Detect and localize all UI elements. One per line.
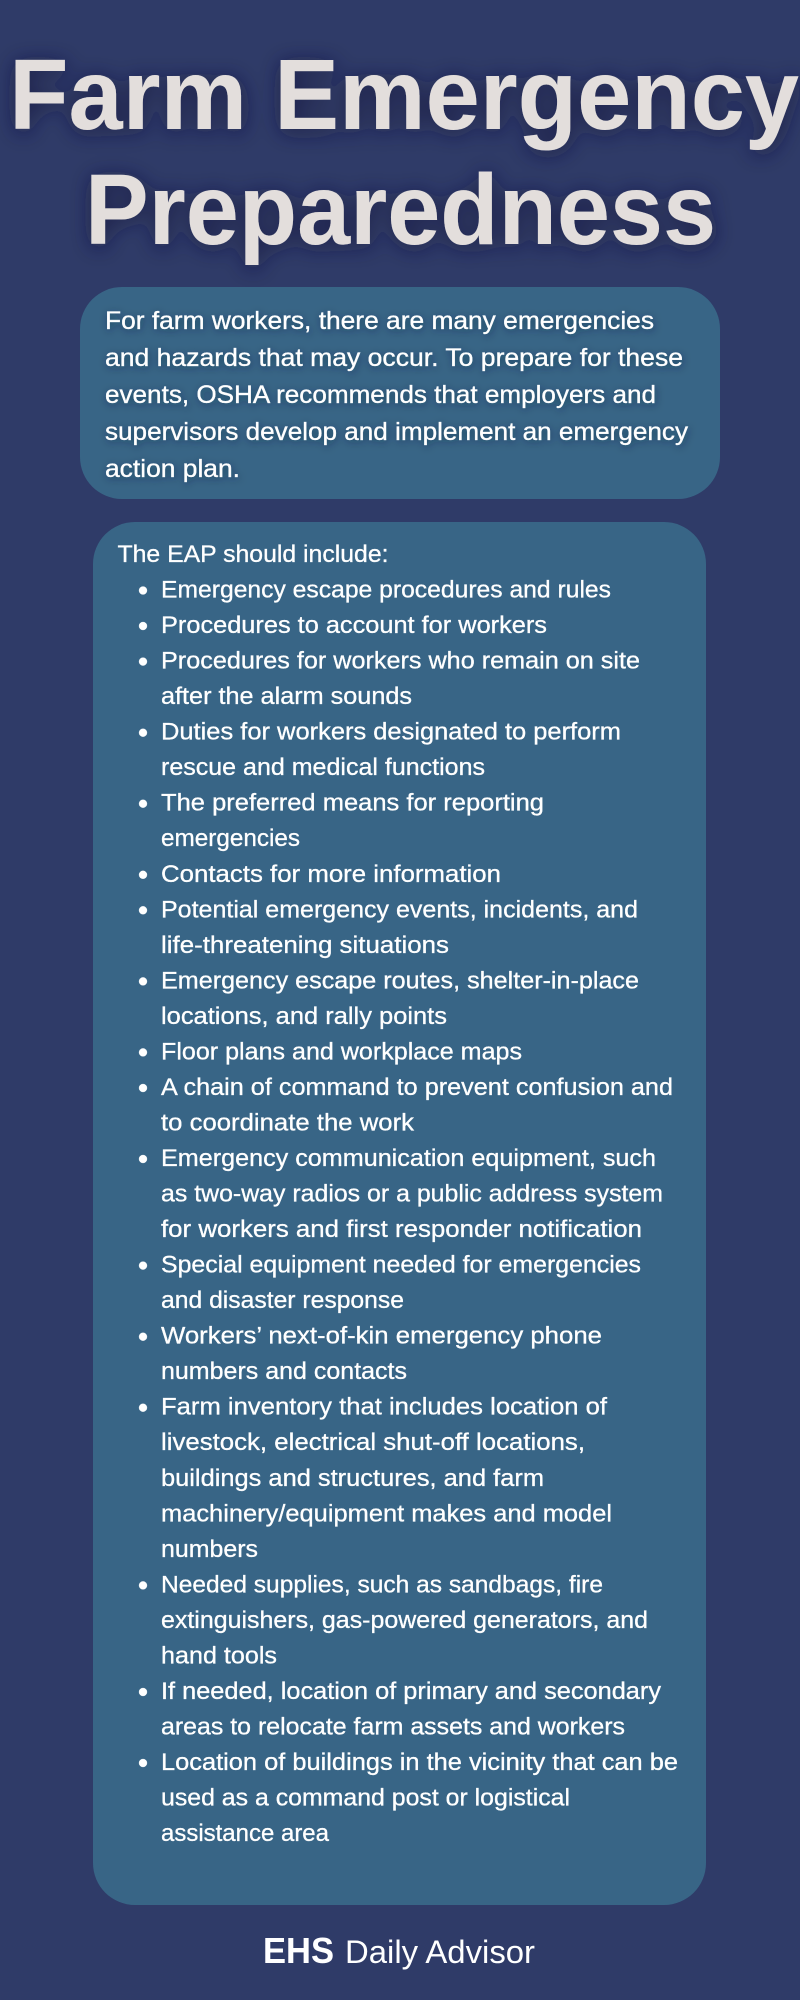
list item: workers on site: after the alarm sounds bbox=[161, 683, 412, 710]
list item: rescue duties: Duties for workers designated to perform bbox=[161, 719, 621, 746]
list item: workers on site bbox=[139, 648, 640, 710]
list item: next of kin bbox=[139, 1323, 602, 1385]
list item: potential events bbox=[139, 896, 638, 959]
list item: special equipment: and disaster response bbox=[161, 1287, 404, 1314]
list item: reporting: The preferred means for reporting bbox=[161, 790, 544, 817]
list item: farm inventory: numbers bbox=[161, 1536, 258, 1563]
list item: needed supplies: hand tools bbox=[161, 1642, 277, 1669]
list item: rescue duties bbox=[139, 719, 621, 781]
list item: special equipment bbox=[139, 1252, 641, 1314]
list item: account for workers: Procedures to account for workers bbox=[161, 612, 547, 639]
intro text bbox=[105, 307, 689, 483]
intro text: action plan. bbox=[105, 455, 240, 483]
footer logo: Daily Advisor bbox=[345, 1934, 535, 1970]
list item: communication equipment: Emergency communication equipment, such bbox=[161, 1145, 656, 1172]
list item: chain of command: A chain of command to prevent confusion and bbox=[161, 1074, 673, 1101]
list item: communication equipment: for workers and first responder notification bbox=[161, 1216, 642, 1243]
intro text: events, OSHA recommends that employers and bbox=[105, 381, 656, 409]
list item: contacts: Contacts for more information bbox=[161, 861, 501, 888]
list item: potential events: life-threatening situations bbox=[161, 932, 449, 959]
list item: command post bbox=[139, 1749, 678, 1847]
intro text: For farm workers, there are many emergencies bbox=[105, 307, 654, 335]
list item: needed supplies: Needed supplies, such as sandbags, fire bbox=[161, 1571, 603, 1598]
title: Farm Emergency bbox=[9, 39, 799, 151]
list item: reporting bbox=[139, 790, 544, 852]
list heading: The EAP should include: bbox=[118, 541, 388, 568]
list item: rescue duties: rescue and medical functions bbox=[161, 754, 485, 781]
list item: communication equipment: as two-way radios or a public address system bbox=[161, 1180, 663, 1208]
list item: farm inventory: Farm inventory that includes location of bbox=[161, 1394, 607, 1421]
panel: EAP list bbox=[93, 522, 706, 1905]
intro text: and hazards that may occur. To prepare for these bbox=[105, 344, 683, 372]
footer logo bbox=[263, 1930, 535, 1971]
intro text: supervisors develop and implement an emergency bbox=[105, 418, 689, 446]
list item: relocation areas: areas to relocate farm assets and workers bbox=[161, 1714, 625, 1740]
list item: farm inventory: machinery/equipment makes and model bbox=[161, 1500, 612, 1527]
list item: needed supplies: extinguishers, gas-powered generators, and bbox=[161, 1607, 648, 1634]
list item: floor plans: Floor plans and workplace maps bbox=[161, 1038, 522, 1065]
list item: command post: assistance area bbox=[161, 1820, 329, 1847]
list item: farm inventory bbox=[139, 1394, 612, 1563]
title bbox=[9, 39, 799, 266]
list item: command post: Location of buildings in the vicinity that can be bbox=[161, 1749, 678, 1776]
list item: chain of command: to coordinate the work bbox=[161, 1110, 415, 1136]
list item: farm inventory: buildings and structures, and farm bbox=[161, 1465, 544, 1492]
list item: command post: used as a command post or logistical bbox=[161, 1784, 570, 1812]
list item: needed supplies bbox=[139, 1571, 648, 1669]
list item: relocation areas bbox=[139, 1678, 662, 1740]
list item: chain of command bbox=[139, 1074, 673, 1136]
footer logo: EHS bbox=[263, 1930, 334, 1971]
list item: escape procedures: Emergency escape procedures and rules bbox=[161, 576, 611, 604]
list item: workers on site: Procedures for workers who remain on site bbox=[161, 648, 640, 675]
list item: next of kin: Workers’ next-of-kin emergency phone bbox=[161, 1323, 602, 1350]
list item: next of kin: numbers and contacts bbox=[161, 1358, 407, 1385]
list item: escape routes: locations, and rally points bbox=[161, 1003, 447, 1030]
list item: potential events: Potential emergency events, incidents, and bbox=[161, 896, 638, 923]
title: Preparedness bbox=[85, 154, 716, 266]
list item: relocation areas: If needed, location of primary and secondary bbox=[161, 1678, 662, 1705]
list item: communication equipment bbox=[139, 1145, 663, 1243]
panel: introduction bbox=[80, 287, 720, 499]
list item: escape routes bbox=[139, 967, 639, 1030]
list item: farm inventory: livestock, electrical shut-off locations, bbox=[161, 1429, 585, 1456]
list item: reporting: emergencies bbox=[161, 825, 300, 852]
list item: escape routes: Emergency escape routes, shelter-in-place bbox=[161, 967, 639, 994]
list item: special equipment: Special equipment needed for emergencies bbox=[161, 1252, 641, 1279]
